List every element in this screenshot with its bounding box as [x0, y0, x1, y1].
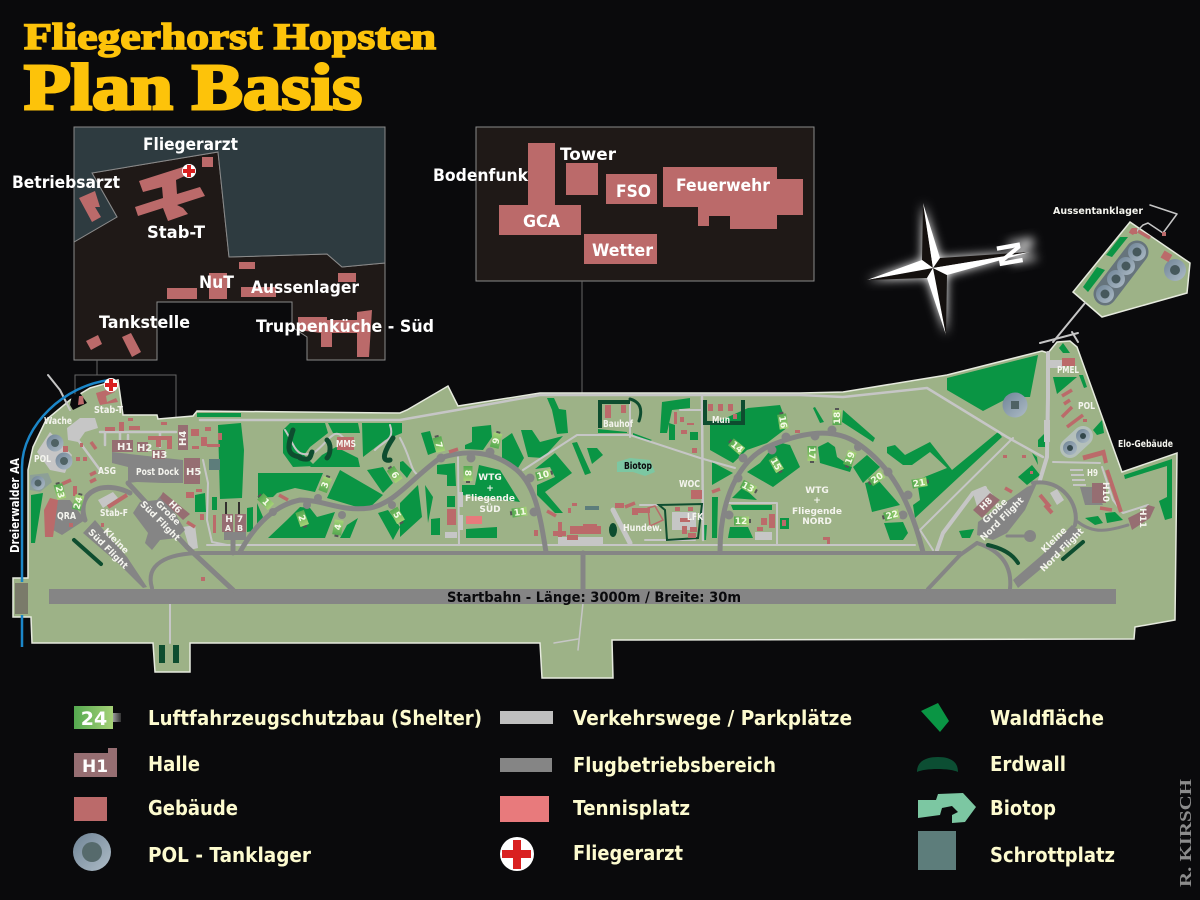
map labels: MMS — [336, 439, 356, 450]
legend: flight operations: Flugbetriebsbereich — [573, 753, 776, 777]
inset panel: tower area: Tower — [560, 145, 617, 165]
legend: earth wall: Erdwall — [990, 752, 1066, 776]
map labels: H9 — [1087, 468, 1098, 479]
map labels: + — [813, 496, 821, 506]
map labels: Aussentanklager — [1053, 206, 1143, 217]
legend: scrap yard: Schrottplatz — [990, 843, 1115, 867]
map labels: H10 — [1100, 482, 1110, 502]
map labels: H3 — [152, 450, 167, 461]
aircraft shelters: 8 — [462, 470, 472, 476]
legend: tennis court: Tennisplatz — [573, 796, 690, 820]
black patch near gate — [70, 393, 87, 410]
compass star: N — [988, 239, 1030, 270]
map labels: H4 — [178, 431, 189, 446]
inset panel: tower area: GCA — [523, 212, 561, 232]
aircraft shelters: 11 — [513, 507, 527, 519]
map labels: Große — [981, 497, 1010, 526]
inset panel: Stab-T area: Aussenlager — [251, 278, 360, 298]
aircraft shelters: 14 — [728, 440, 744, 456]
map labels: Fliegende — [465, 494, 515, 504]
shelter taxi nodes — [269, 426, 912, 520]
map labels: H2 — [137, 443, 152, 454]
aircraft shelters: 19 — [844, 451, 858, 466]
blue canal: Dreierwalder AA — [22, 380, 110, 647]
legend: building — [74, 796, 238, 821]
legend: earth wall — [917, 752, 1066, 776]
map labels: Kleine — [1040, 526, 1069, 555]
map labels: WOC — [679, 479, 700, 490]
map labels: Wache — [44, 416, 72, 427]
earth walls — [74, 399, 1083, 663]
aircraft shelters: 20 — [870, 471, 886, 487]
legend: biotope: Biotop — [990, 796, 1056, 820]
inset panel: Stab-T area: Tankstelle — [99, 313, 190, 333]
airbase ground area — [13, 341, 1177, 678]
legend: roads: Verkehrswege / Parkplätze — [573, 706, 852, 730]
map labels: Große — [153, 499, 182, 528]
inset panel: Stab-T area: Fliegerarzt — [143, 135, 238, 155]
aircraft shelters: 2 — [295, 514, 307, 523]
map labels: WTG — [805, 486, 829, 496]
inset panel: tower area: FSO — [616, 182, 651, 202]
legend: tennis court — [500, 796, 690, 822]
map labels: H8 — [978, 496, 995, 513]
roads and parking — [48, 205, 1177, 650]
canal bridge block — [15, 583, 28, 614]
aircraft shelters: 23 — [53, 485, 65, 500]
scrap yards — [209, 459, 599, 510]
compass star — [867, 203, 1045, 335]
aircraft shelters: 9 — [491, 437, 503, 446]
legend: fuel depot — [73, 833, 311, 871]
legend: flight operations — [500, 753, 776, 777]
flight operations area — [49, 426, 1128, 604]
inset panel: Stab-T area: Truppenküche - Süd — [256, 317, 434, 337]
legend — [73, 703, 1115, 871]
map labels: + — [486, 484, 494, 494]
map labels: PMEL — [1057, 365, 1079, 376]
map labels: Mun — [712, 415, 730, 426]
map labels — [8, 206, 1173, 606]
map labels: B — [237, 524, 243, 533]
inset panel: Stab-T area: Stab-T — [147, 223, 205, 243]
map labels: Stab-T — [94, 405, 123, 416]
buildings on map — [44, 228, 1172, 581]
map labels: 7 — [237, 515, 243, 525]
inset panel: tower area: Feuerwehr — [676, 176, 771, 196]
title — [24, 17, 437, 124]
aircraft shelters: 24 — [73, 496, 85, 511]
map labels: H — [225, 515, 233, 525]
aircraft shelters: 18 — [833, 412, 843, 424]
legend: building: Gebäude — [148, 796, 238, 820]
map labels: Nord Flight — [1039, 526, 1087, 574]
map labels: Süd Flight — [138, 500, 182, 544]
inset panel: tower area: Wetter — [592, 241, 654, 261]
aircraft shelters: 17 — [806, 447, 816, 459]
title: Fliegerhorst Hopsten — [24, 17, 437, 58]
legend: flight surgeon — [500, 837, 683, 871]
compass star: N — [1000, 234, 1045, 267]
legend: hangar — [74, 748, 200, 777]
aircraft shelters: 12 — [735, 517, 747, 527]
map labels: Hundew. — [623, 523, 662, 534]
map labels: A — [225, 524, 232, 533]
legend: shelter: 24 — [81, 708, 107, 730]
map labels: Elo-Gebäude — [1118, 439, 1173, 450]
outer tank depot area — [1073, 222, 1190, 317]
author credit: R. KIRSCH — [1176, 779, 1195, 887]
legend: scrap yard — [918, 831, 1115, 870]
map labels: Süd Flight — [86, 528, 130, 572]
map labels: QRA — [57, 511, 76, 522]
inset panel: Stab-T area — [12, 127, 434, 360]
map labels: H11 — [1137, 508, 1147, 528]
aircraft shelters: 7 — [432, 441, 444, 450]
title: Plan Basis — [24, 51, 362, 124]
map labels: Dreierwalder AA — [8, 457, 22, 553]
biotope area on map — [617, 458, 655, 476]
map labels: H5 — [186, 467, 201, 478]
map labels: Nord Flight — [979, 495, 1027, 543]
aircraft shelters: 10 — [536, 470, 551, 482]
map labels: LFK — [687, 512, 704, 523]
aircraft shelters: 21 — [912, 478, 926, 490]
fuel tanks — [30, 243, 1186, 492]
legend: biotope — [918, 793, 1056, 823]
flight surgeon marker on map — [104, 378, 118, 392]
inset panel: tower area: Bodenfunk — [433, 166, 529, 186]
legend: fuel depot: POL - Tanklager — [148, 843, 311, 867]
map labels: Kleine — [101, 527, 130, 556]
map labels: Biotop — [624, 461, 652, 472]
inset panel: Stab-T area: NuT — [199, 273, 234, 293]
map labels: Bauhof — [603, 419, 633, 430]
legend: forest — [921, 703, 1104, 732]
map labels: WTG — [478, 473, 502, 483]
aircraft shelters: 16 — [776, 415, 788, 429]
aircraft shelters: 22 — [885, 510, 900, 522]
aircraft shelters: 1 — [260, 497, 271, 508]
legend: hangar: Halle — [148, 752, 200, 776]
aircraft shelters — [52, 408, 930, 538]
map labels: POL — [34, 454, 51, 465]
aircraft shelters: 13 — [740, 481, 755, 495]
legend: hangar: H1 — [82, 757, 108, 777]
map labels: Fliegende — [792, 507, 842, 517]
aircraft shelters: 3 — [320, 481, 332, 490]
map labels: Post Dock — [136, 467, 179, 478]
forest areas — [31, 237, 1172, 543]
map labels: ASG — [98, 466, 116, 477]
inset panel: Stab-T area: Betriebsarzt — [12, 173, 120, 193]
map labels: H6 — [166, 499, 183, 516]
connector lines to insets — [75, 281, 582, 520]
map labels: Startbahn - Länge: 3000m / Breite: 30m — [447, 590, 741, 606]
map labels: Stab-F — [100, 508, 128, 519]
legend: shelter: Luftfahrzeugschutzbau (Shelter) — [148, 706, 482, 730]
map labels: POL — [1078, 401, 1095, 412]
aircraft shelters: 4 — [334, 523, 344, 531]
legend: forest: Waldfläche — [990, 706, 1104, 730]
inset panel: tower area — [433, 127, 814, 281]
map labels: H1 — [117, 442, 132, 453]
aircraft shelters: 5 — [390, 510, 402, 521]
map labels: NORD — [802, 517, 832, 527]
aircraft shelters: 6 — [388, 470, 400, 481]
hangars — [112, 425, 1155, 532]
legend: flight surgeon: Fliegerarzt — [573, 841, 683, 865]
runway — [49, 589, 1116, 604]
aircraft shelters: 15 — [768, 457, 783, 472]
tennis court — [466, 516, 482, 524]
map labels: SÜD — [479, 504, 501, 515]
